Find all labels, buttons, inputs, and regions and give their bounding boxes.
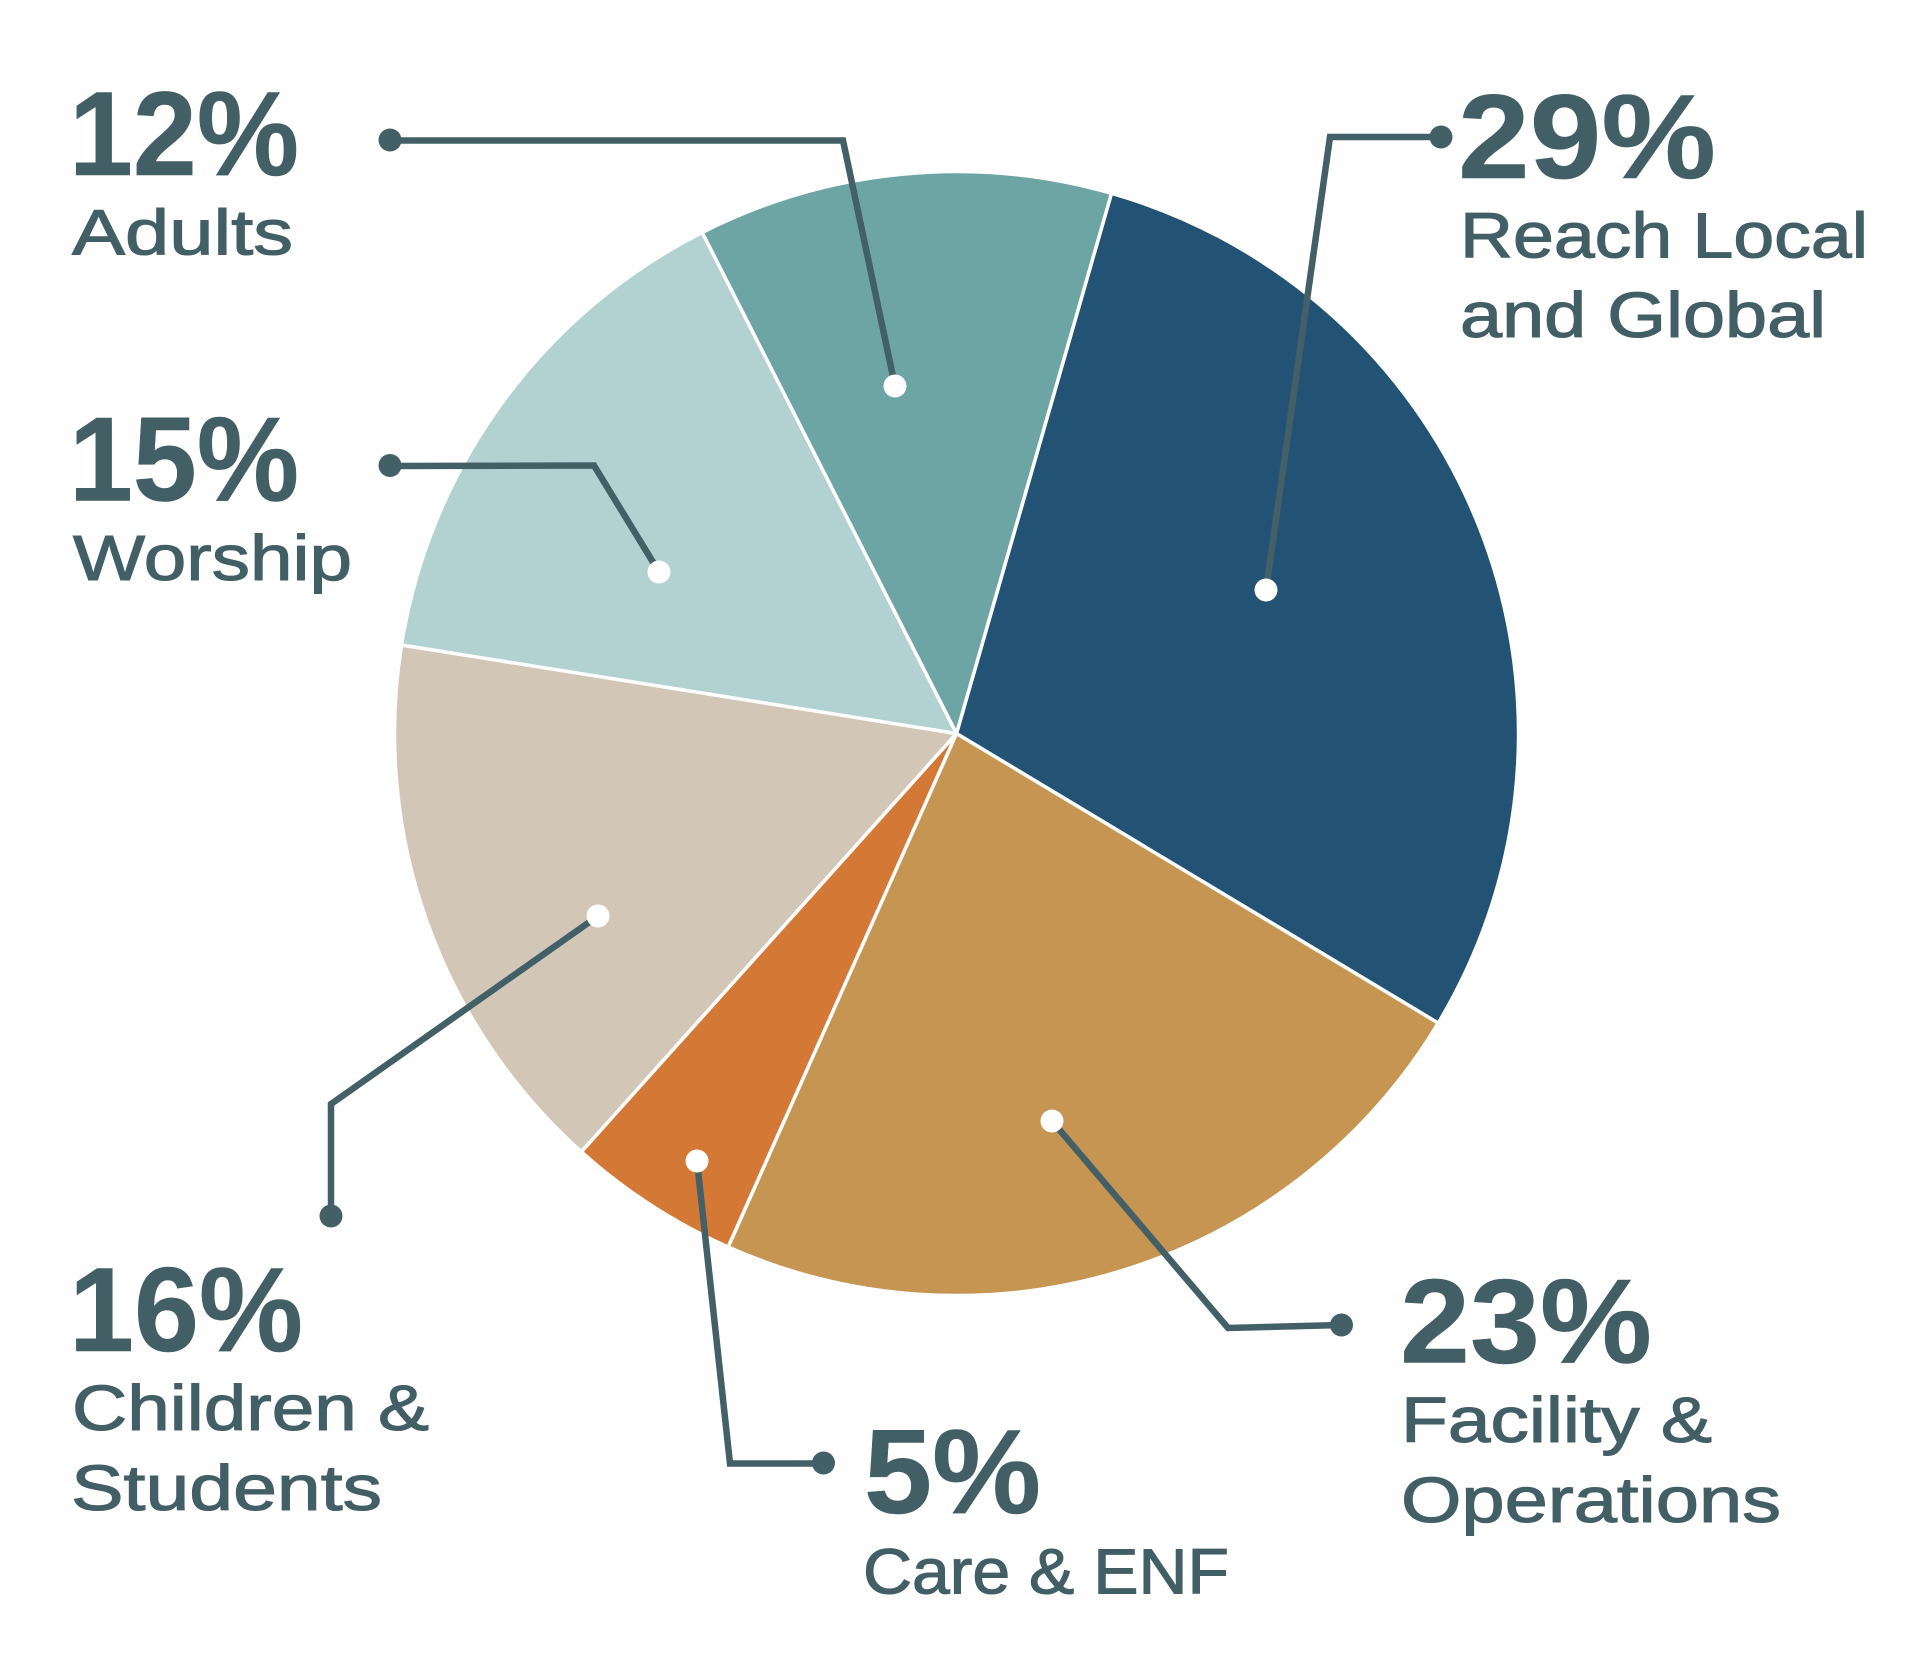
label: Adults 12%: Adults xyxy=(72,196,293,268)
label: Facility & Operations 23%: Facility & xyxy=(1401,1384,1712,1456)
label: Children & Students 16%: 16% xyxy=(69,1243,303,1377)
label: Care & ENF 5% xyxy=(863,1405,1229,1608)
leader line: Reach Local and Global xyxy=(1254,126,1452,602)
label: Reach Local and Global 29% xyxy=(1458,70,1868,351)
label: Facility & Operations 23% xyxy=(1400,1254,1781,1536)
label: Worship 15% xyxy=(69,392,352,594)
slice: Facility & Operations 23% xyxy=(728,734,1438,1296)
label: Facility & Operations 23%: 23% xyxy=(1400,1254,1652,1388)
label: Worship 15%: 15% xyxy=(69,392,299,526)
slice: Worship 15% xyxy=(402,232,956,734)
leader line: Care & ENF xyxy=(686,1150,835,1474)
label: Care & ENF 5%: Care & ENF xyxy=(863,1536,1229,1608)
label: Children & Students 16%: Students xyxy=(71,1452,382,1524)
leader line: Adults xyxy=(378,128,906,398)
pie chart xyxy=(395,172,1519,1296)
label: Care & ENF 5%: 5% xyxy=(864,1405,1041,1539)
label: Children & Students 16%: Children & xyxy=(72,1372,429,1444)
label: Adults 12% xyxy=(69,67,299,268)
leader line: Children & Students xyxy=(320,904,610,1228)
label: Children & Students 16% xyxy=(69,1243,429,1524)
label: Reach Local and Global 29%: 29% xyxy=(1458,70,1716,204)
slice: Adults 12% xyxy=(702,172,1112,734)
slice: Care & ENF 5% xyxy=(581,734,956,1247)
slice: Children & Students 16% xyxy=(395,645,956,1152)
leader line: Worship xyxy=(378,454,670,584)
leader line: Facility & Operations xyxy=(1040,1110,1353,1336)
label: Reach Local and Global 29%: and Global xyxy=(1460,279,1826,351)
label: Adults 12%: 12% xyxy=(69,67,299,201)
label: Worship 15%: Worship xyxy=(73,522,352,594)
label: Reach Local and Global 29%: Reach Local xyxy=(1460,200,1868,272)
label: Facility & Operations 23%: Operations xyxy=(1401,1464,1781,1536)
slice: Reach Local and Global 29% xyxy=(956,193,1519,1023)
